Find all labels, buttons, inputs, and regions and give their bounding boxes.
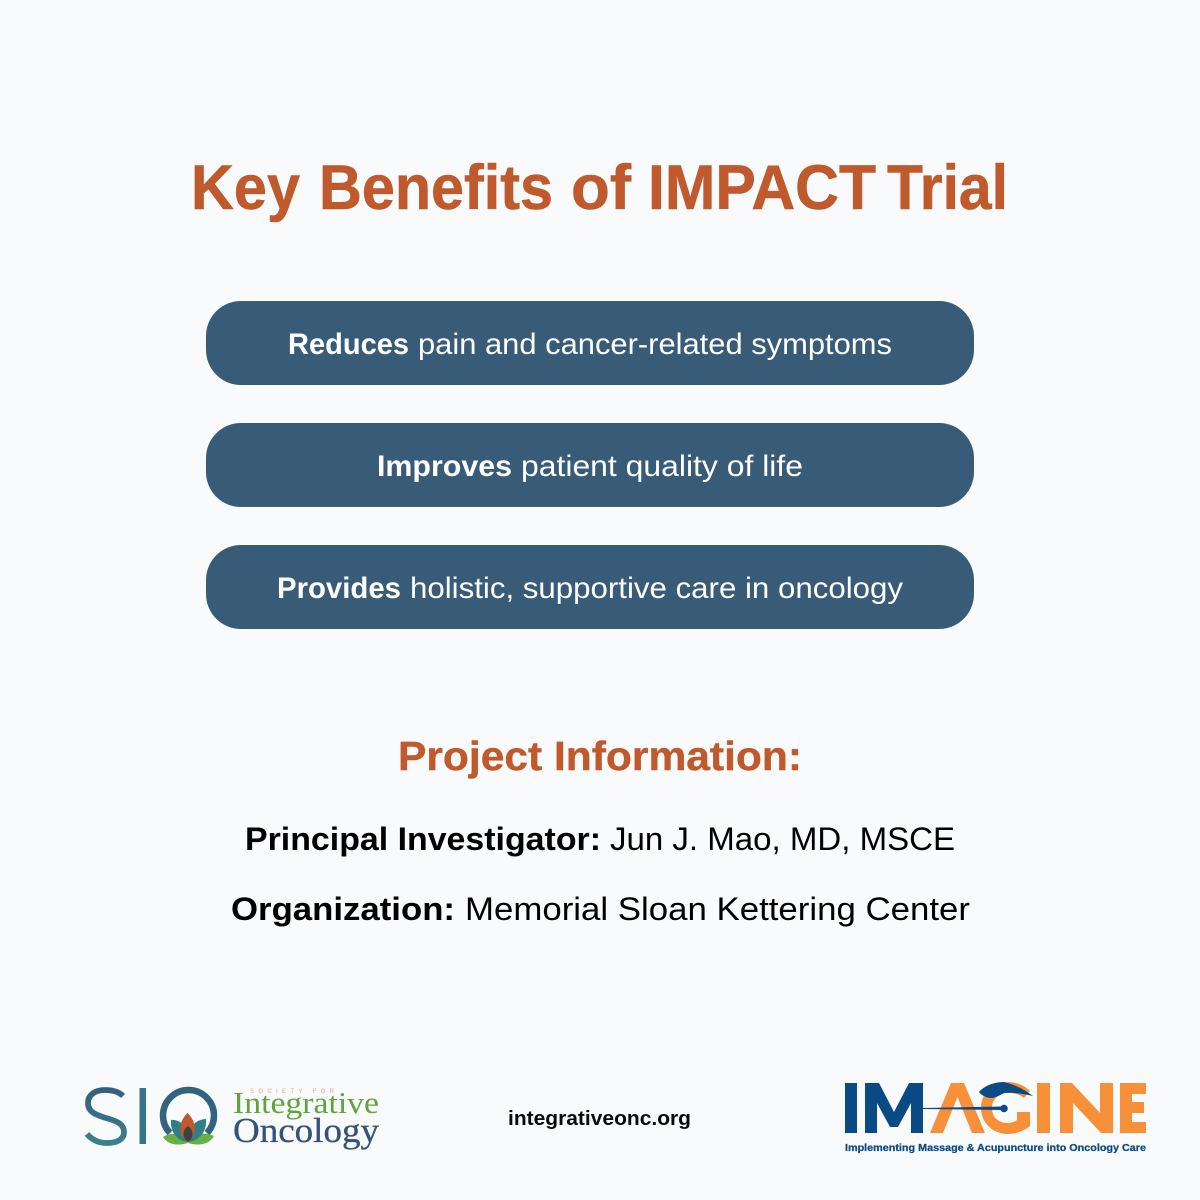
panel: benefit pills [206, 301, 974, 629]
letters IM [845, 1083, 923, 1133]
logo: Society for Integrative Oncology [87, 1085, 380, 1150]
text: principal investigator: Principal Investigator: [245, 821, 601, 857]
pill: provides holistic care: Provides [277, 572, 401, 605]
text: organization [231, 891, 970, 927]
heading: project information: Project Information: [398, 733, 802, 779]
text: organization: Memorial Sloan Kettering Center [465, 891, 970, 927]
pill: improves quality of life: Improves [377, 450, 512, 483]
pill: improves quality of life [206, 423, 974, 507]
icon: acupuncture needle [923, 1103, 1017, 1115]
text: organization: Organization: [231, 891, 455, 927]
text: society for: SOCIETY FOR [250, 1089, 335, 1095]
text: principal investigator [245, 821, 955, 857]
logo: IMAGINE [845, 1082, 1146, 1154]
pill: provides holistic care [206, 545, 974, 629]
title: of [571, 153, 632, 223]
pill: reduces pain: Reduces [288, 328, 409, 361]
text: integrative: Integrative [233, 1085, 379, 1120]
icon: lotus [163, 1113, 214, 1145]
title: Key [191, 153, 300, 223]
text: oncology: Oncology [233, 1111, 380, 1150]
text: principal investigator: Jun J. Mao, MD, MSCE [610, 821, 955, 857]
title: IMPACT [648, 153, 876, 223]
title: Benefits [319, 153, 553, 223]
icon: letter S [87, 1090, 124, 1143]
pill: improves quality of life: patient quality of life [521, 450, 803, 483]
pill: reduces pain [206, 301, 974, 385]
icon: letter O ring [163, 1090, 214, 1133]
icon: letter I [140, 1088, 146, 1144]
text: tagline: Implementing Massage & Acupuncture into Oncology Care [845, 1143, 1146, 1154]
pill: reduces pain: pain and cancer-related symptoms [418, 328, 892, 361]
text: website: integrativeonc.org [508, 1108, 691, 1130]
pill: provides holistic care: holistic, supportive care in oncology [410, 572, 903, 605]
letters AGINE [930, 1082, 1146, 1134]
title: Trial [887, 153, 1008, 223]
title [191, 153, 1008, 223]
icon: hand [979, 1082, 1033, 1098]
